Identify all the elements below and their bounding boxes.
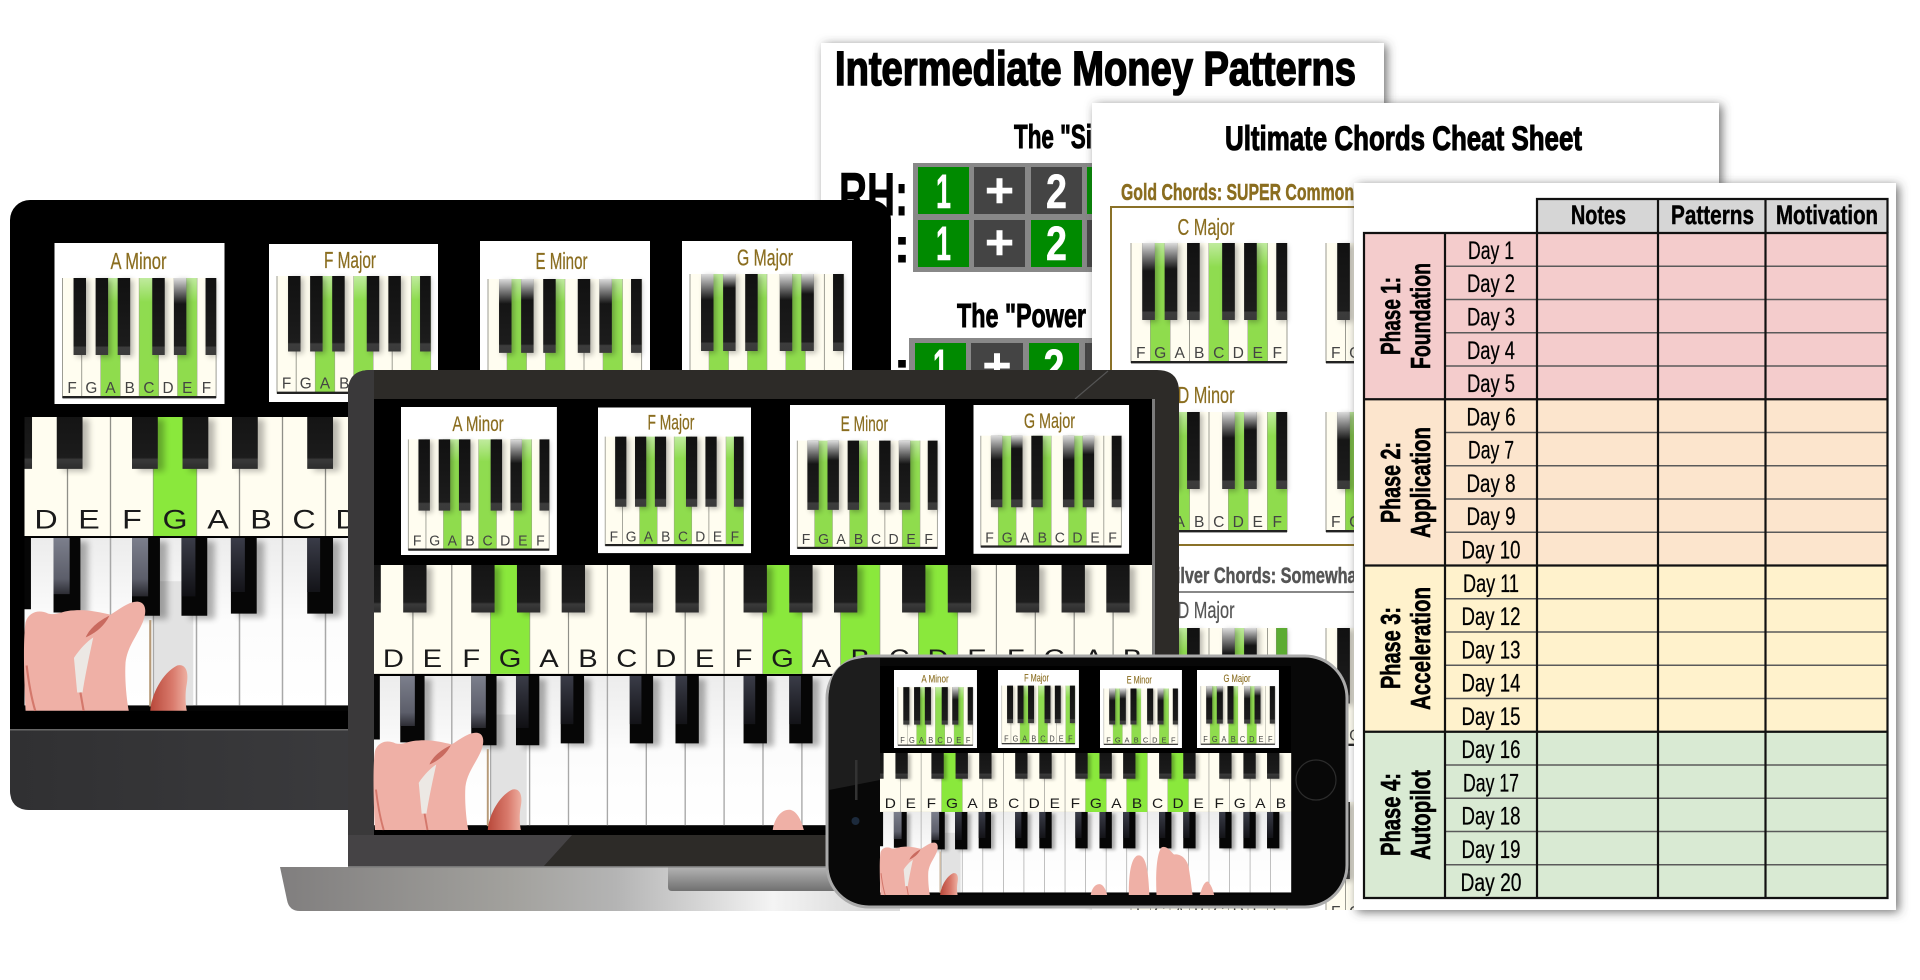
note keyboard	[24, 417, 885, 536]
gold chords frame	[1111, 207, 1701, 545]
phone camera	[852, 817, 860, 825]
chord diagram: C Major	[1131, 243, 1287, 363]
chord card: F Major	[998, 670, 1079, 748]
phase 2 label: Application	[1405, 427, 1436, 538]
chord card: F Major: FGABCDEF	[1004, 734, 1073, 744]
panel: 20 day practice tracker sheet	[1354, 183, 1896, 910]
heading: gold chords: Gold Chords: SUPER Common	[1121, 179, 1354, 205]
chord card: F Major: FGABCDEF	[282, 376, 426, 393]
chord card: F Major: F Major	[647, 411, 694, 434]
beat grid: power pattern: 2	[1044, 341, 1064, 394]
chord card: A Minor: A Minor	[921, 674, 949, 686]
chord card: G Major: FGABCDEF	[985, 530, 1117, 547]
day labels 1 to 5: Day 4	[1467, 337, 1515, 365]
chord card: G Major	[974, 405, 1129, 554]
chord card: A Minor	[894, 670, 977, 748]
phase 2: application rows	[1364, 399, 1888, 566]
day labels 1 to 5: Day 5	[1467, 370, 1515, 398]
chord card: E Minor	[790, 405, 945, 555]
device: smartphone	[827, 656, 1347, 907]
heading: Ultimate Chords Cheat Sheet: Ultimate Chords Cheat Sheet	[1225, 120, 1582, 158]
day labels 11 to 15: Day 12	[1462, 603, 1520, 631]
chord label: C Major: C Major	[1178, 214, 1235, 240]
chord card: E Minor: FGABCDEF	[493, 376, 637, 393]
table header: Notes	[1571, 200, 1626, 230]
note keyboard: DEFGABCDEFGABCDEFGAB	[34, 505, 874, 535]
chord diagram: D Major: FGABCDEF	[1136, 728, 1282, 745]
phase 1 label: Foundation	[1405, 263, 1436, 369]
chord card: E Minor: E Minor	[841, 412, 888, 436]
beat grid: first pattern: +	[985, 165, 1014, 218]
chord card: F Major: F Major	[1024, 673, 1049, 685]
day labels 1 to 5: Day 1	[1468, 237, 1514, 265]
chord diagram: second silver chord	[1326, 628, 1482, 746]
beat grid: first pattern: 2	[1046, 166, 1067, 219]
beat grid: first pattern: 2	[1046, 218, 1067, 271]
day labels 16 to 20: Day 20	[1460, 869, 1522, 897]
phone home button	[1296, 760, 1336, 800]
chord card: G Major	[1197, 670, 1279, 748]
chord diagram: D Minor: FGABCDEF	[1136, 514, 1282, 531]
day labels 16 to 20: Day 19	[1462, 836, 1520, 864]
beat grid: first pattern: +	[985, 217, 1014, 270]
phase 2 label: Phase 2:	[1375, 442, 1406, 523]
day labels 16 to 20: Day 17	[1463, 770, 1519, 798]
heading: Intermediate Money Patterns: Intermediate Money Patterns	[835, 43, 1356, 96]
chord card: A Minor: FGABCDEF	[900, 736, 971, 745]
day labels 11 to 15: Day 13	[1462, 636, 1520, 664]
day labels 1 to 5: Day 3	[1467, 304, 1515, 332]
note keyboard	[374, 565, 1152, 674]
panel: Ultimate Chords Cheat Sheet	[1092, 103, 1719, 922]
chord diagrams: bottom row: FGABCDEF	[1136, 904, 1282, 921]
beat grid: first pattern: 1	[936, 166, 951, 219]
note keyboard: DEFGABCDEFGABCDEFGAB	[885, 797, 1286, 812]
phase 2 label	[1375, 427, 1436, 538]
chord card: F Major: F Major	[324, 247, 376, 273]
table header: Patterns	[1671, 200, 1754, 230]
beat grid: power pattern: +	[982, 340, 1012, 393]
chord label: D Minor: D Minor	[1178, 382, 1235, 408]
keyboard video with hands	[880, 812, 1291, 895]
beat grid: power pattern	[909, 338, 1092, 400]
table header: Motivation	[1776, 200, 1878, 230]
panel: Intermediate Money Patterns sheet	[821, 43, 1384, 400]
chord card: E Minor: E Minor	[1127, 675, 1152, 687]
beat grid: first pattern: 1	[936, 218, 951, 271]
phone speaker	[855, 760, 858, 800]
chord card: E Minor	[480, 241, 650, 401]
day labels 1 to 5: Day 2	[1467, 270, 1515, 298]
chord card: G Major: G Major	[737, 244, 793, 270]
device: desktop monitor	[10, 200, 891, 810]
day labels 1 to 5	[1467, 237, 1515, 398]
chord diagram: fourth gold chord: FGABCDEF	[1331, 514, 1477, 531]
phase 3 label: Phase 3:	[1375, 607, 1406, 689]
chord diagram: D Minor	[1131, 412, 1287, 532]
chord card: G Major: FGABCDEF	[695, 376, 839, 393]
chord card: E Minor: E Minor	[536, 248, 588, 274]
chord card: A Minor	[401, 407, 557, 555]
keyboard video with hands	[374, 676, 1152, 830]
day labels 6 to 10	[1462, 404, 1520, 564]
day labels 11 to 15: Day 11	[1463, 570, 1519, 598]
chord diagram: D Major	[1131, 628, 1287, 746]
label: power pattern colon: :	[894, 343, 910, 396]
chord diagram: fourth gold chord	[1326, 412, 1482, 532]
chord diagram: second gold chord	[1326, 243, 1482, 363]
chord diagrams: bottom row	[1130, 801, 1354, 910]
day labels 16 to 20: Day 18	[1462, 802, 1520, 830]
chord label: D Major: D Major	[1178, 597, 1235, 623]
phase 3: acceleration rows	[1364, 566, 1888, 732]
phase 1 label: Phase 1:	[1375, 277, 1406, 355]
chord diagram: second gold chord: FGABCDEF	[1331, 345, 1477, 362]
beat grid: first pattern	[913, 163, 1092, 272]
phase 1 label	[1375, 263, 1436, 369]
phase 4 label	[1375, 770, 1436, 860]
phase 4 label: Autopilot	[1405, 770, 1436, 860]
note keyboard: DEFGABCDEFGABCDEFGAB	[383, 645, 1142, 672]
chord card: G Major: G Major	[1224, 673, 1251, 685]
chord card: A Minor: A Minor	[452, 413, 504, 436]
laptop base	[280, 867, 900, 911]
note keyboard	[880, 753, 1291, 812]
chord card: F Major: FGABCDEF	[610, 529, 739, 545]
device: laptop	[280, 370, 1179, 911]
phase 4: autopilot rows	[1364, 732, 1888, 898]
phase 3 label	[1375, 587, 1436, 710]
chord card: A Minor: FGABCDEF	[413, 533, 545, 550]
chord diagram: C Major: FGABCDEF	[1136, 345, 1282, 362]
chord card: E Minor	[1100, 670, 1182, 748]
chord card: F Major	[269, 244, 438, 402]
day labels 11 to 15: Day 14	[1462, 670, 1521, 698]
day labels 6 to 10: Day 8	[1466, 470, 1516, 498]
phase 4 label: Phase 4:	[1375, 773, 1406, 856]
chord card: G Major: FGABCDEF	[1203, 735, 1273, 744]
day labels 16 to 20: Day 16	[1462, 736, 1520, 764]
keyboard video with hands	[24, 538, 885, 711]
chord diagrams: bottom row: FGABCDEF	[1331, 904, 1477, 921]
chord card: E Minor: FGABCDEF	[1106, 735, 1176, 744]
day labels 6 to 10: Day 6	[1466, 404, 1516, 432]
subheading: power pattern: The "Power	[957, 297, 1086, 334]
table header	[1537, 199, 1888, 233]
day labels 6 to 10: Day 9	[1466, 503, 1516, 531]
phase 3 label: Acceleration	[1405, 587, 1436, 710]
beat grid: power pattern: 1	[933, 341, 948, 394]
phase 1: foundation rows	[1364, 233, 1888, 399]
laptop lid	[348, 370, 1179, 868]
chord diagram: second silver chord: FGABCDEF	[1331, 728, 1477, 745]
chord card: A Minor	[54, 243, 224, 404]
label: left hand colon: :	[894, 220, 910, 273]
chord card: G Major	[682, 241, 852, 401]
day labels 6 to 10: Day 7	[1468, 436, 1514, 464]
chord card: A Minor: A Minor	[110, 248, 167, 274]
laptop hinge notch	[668, 867, 840, 891]
silver chords rule	[1111, 591, 1701, 593]
heading: silver chords: Silver Chords: Somewhat	[1165, 563, 1362, 588]
day labels 16 to 20	[1460, 736, 1522, 897]
chord card: G Major: G Major	[1024, 410, 1075, 433]
day labels 6 to 10: Day 10	[1462, 536, 1520, 564]
chord card: E Minor: FGABCDEF	[802, 532, 933, 548]
label: right hand: RH:	[839, 161, 908, 228]
chord card: F Major	[598, 408, 751, 553]
subheading: first pattern: The "Si	[1014, 118, 1092, 155]
day labels 11 to 15: Day 15	[1462, 703, 1520, 731]
chord card: A Minor: FGABCDEF	[67, 380, 211, 397]
day labels 11 to 15	[1462, 570, 1521, 731]
